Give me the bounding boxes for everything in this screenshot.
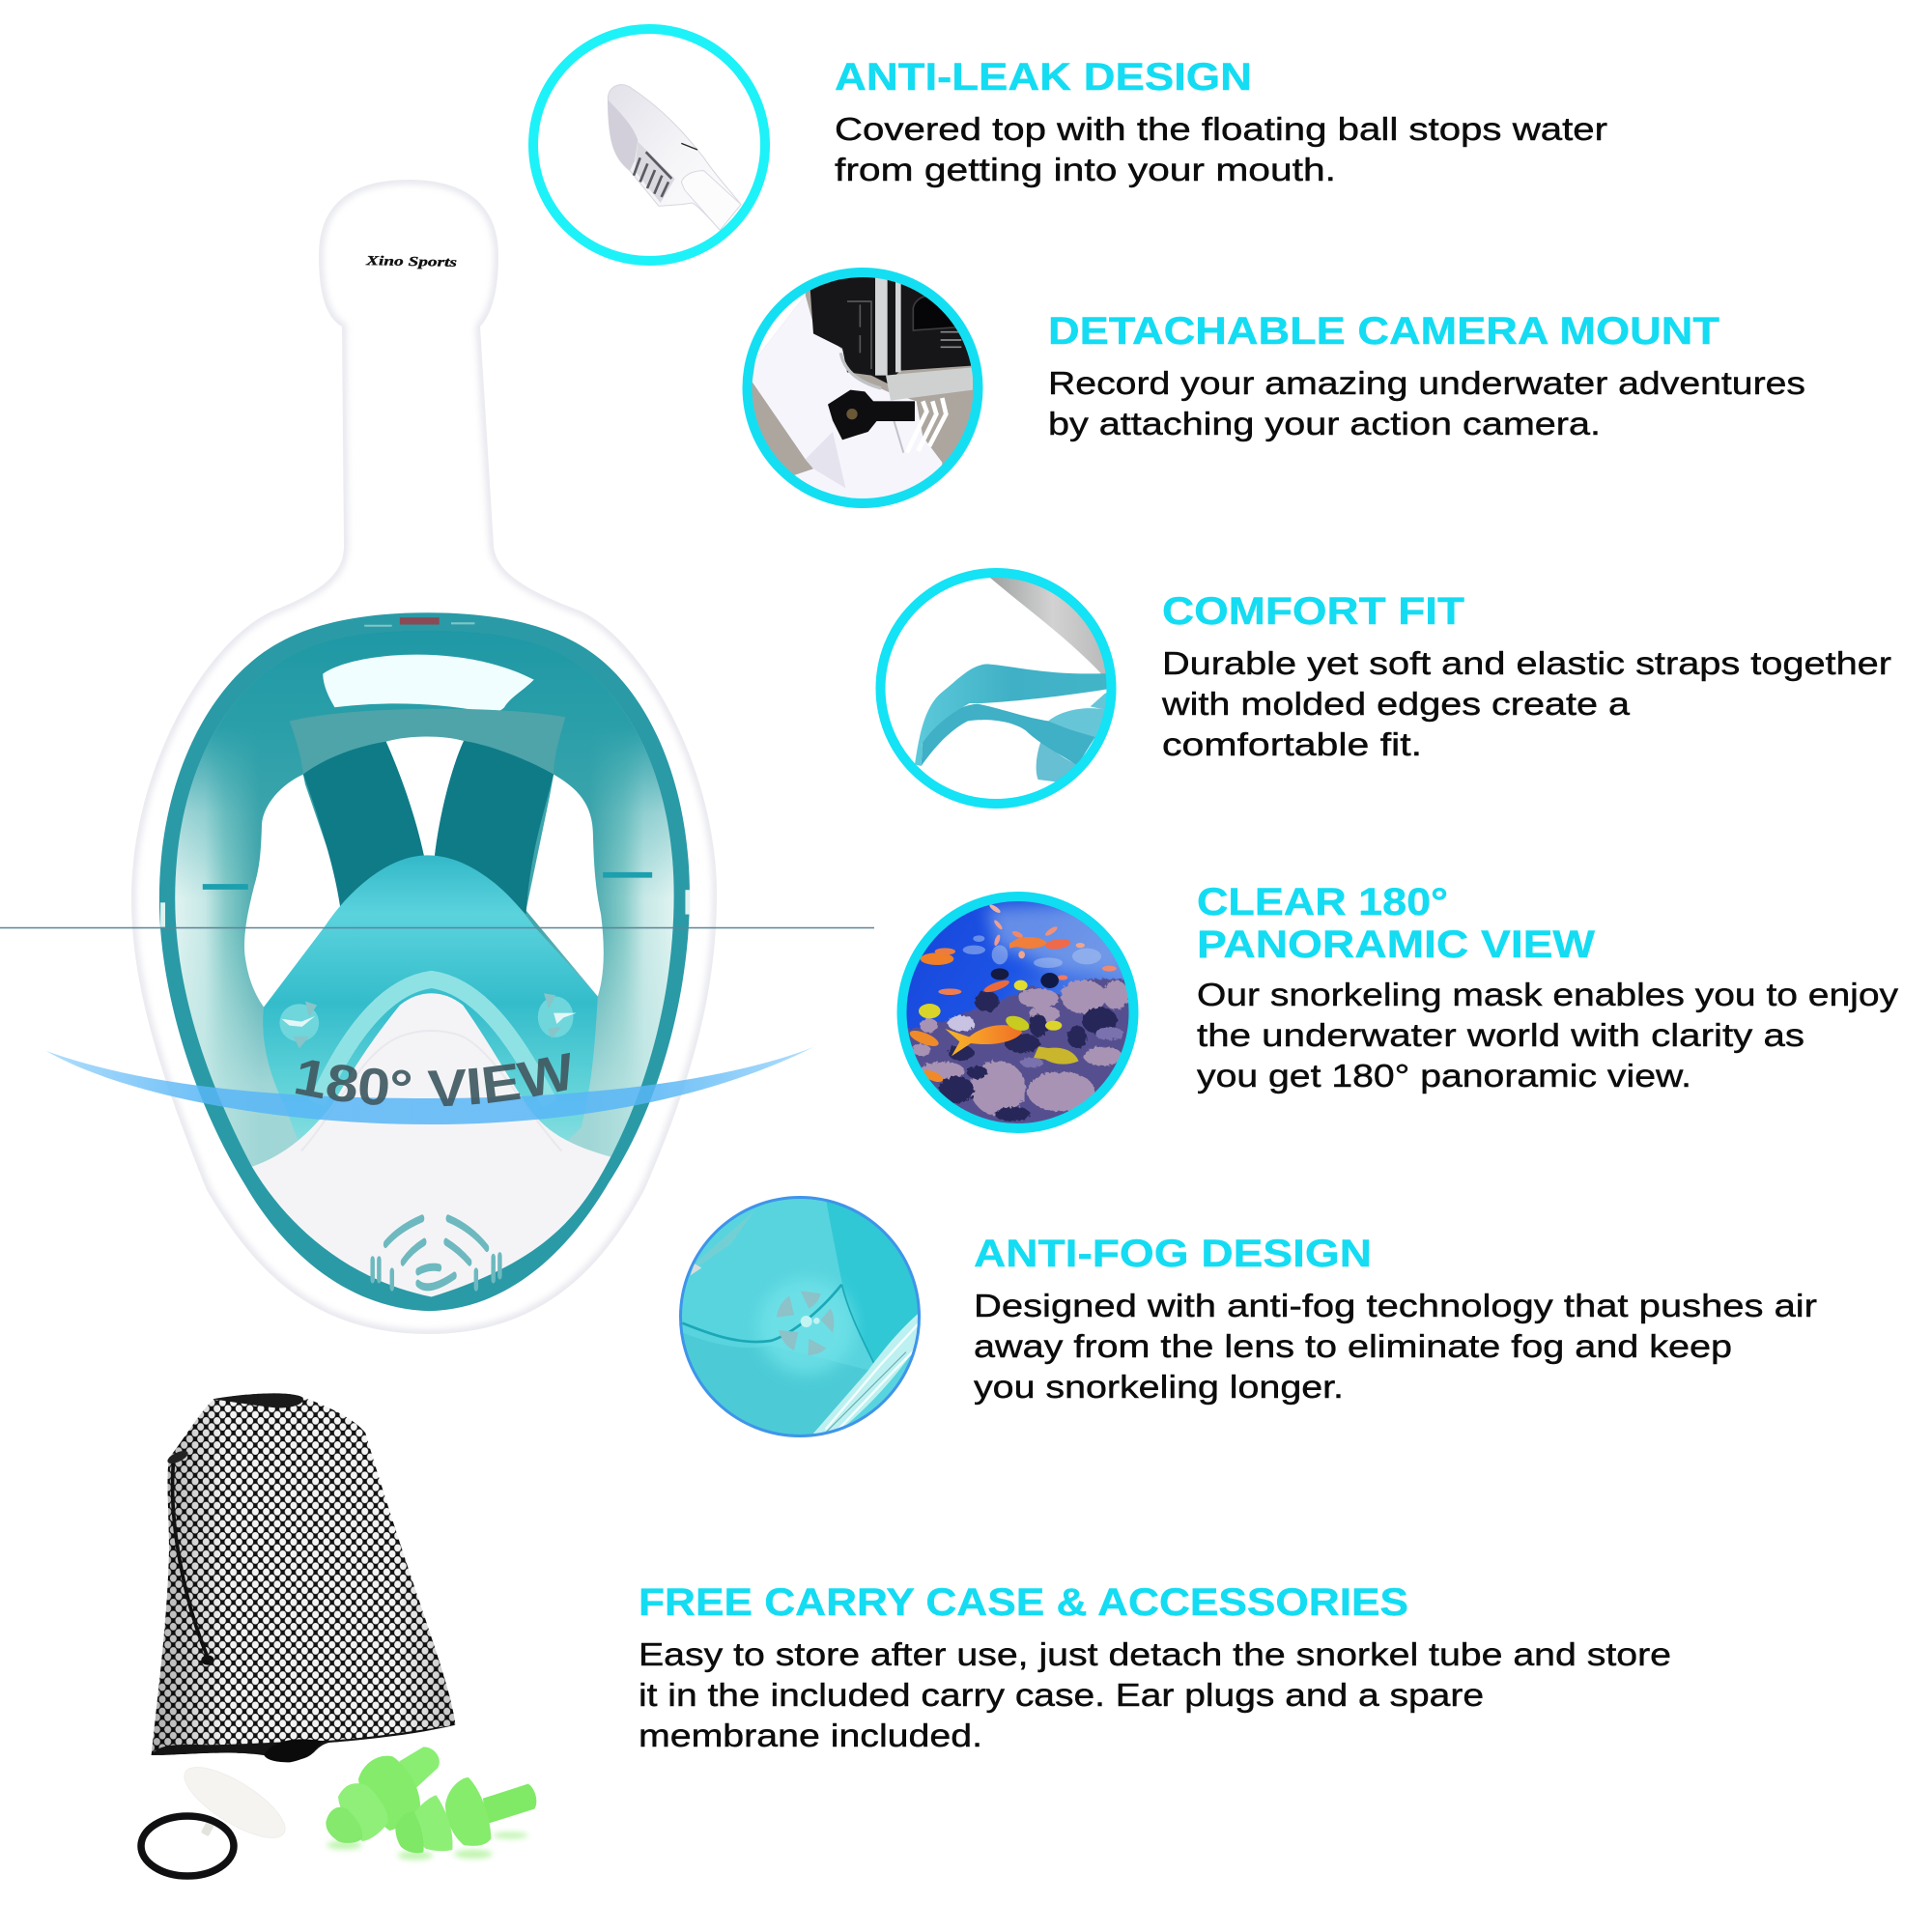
bag bottom hem <box>152 1725 456 1761</box>
text: anti-fog description: Designed with anti-fog technology that pushes air <box>974 1288 1817 1323</box>
blue edge ring <box>680 1198 920 1435</box>
text: camera description <box>1048 365 1805 441</box>
left strap <box>303 742 424 910</box>
cord toggle <box>166 1448 189 1466</box>
top label <box>364 617 474 626</box>
mesh body <box>152 1393 456 1761</box>
text: camera description: by attaching your action camera. <box>1048 406 1601 441</box>
heading: panoramic view: PANORAMIC VIEW <box>1197 923 1595 966</box>
exhaust vents <box>373 1218 499 1288</box>
white window left <box>244 775 349 1007</box>
bag tab <box>264 1739 322 1762</box>
circle: anti-fog <box>674 1191 925 1442</box>
brand logo: Xino Sports <box>365 254 458 270</box>
heading: comfort fit: COMFORT FIT <box>1162 590 1464 633</box>
nose pocket <box>263 855 598 1151</box>
text: comfort description: with molded edges create a <box>1161 686 1631 722</box>
spare membrane <box>175 1754 295 1851</box>
membrane disc <box>175 1754 295 1851</box>
side ticks <box>203 875 652 887</box>
left vent flower <box>279 1001 319 1048</box>
heading: camera mount: DETACHABLE CAMERA MOUNT <box>1048 310 1719 353</box>
cyan ring <box>902 896 1134 1128</box>
mesh shading <box>152 1393 456 1761</box>
lens top tint <box>175 631 674 1167</box>
snorkel mask product <box>131 180 717 1334</box>
heading: panoramic view: CLEAR 180° <box>1197 881 1448 923</box>
front plug <box>395 1777 536 1853</box>
snorkel top nozzle <box>608 85 741 230</box>
horizontal water line <box>0 927 874 929</box>
white chin piece <box>252 993 611 1297</box>
teal rim <box>159 612 690 1311</box>
membrane stem <box>201 1817 216 1836</box>
text: anti-leak description: from getting into your mouth. <box>835 152 1336 187</box>
text: carry case description: Easy to store after use, just detach the snorkel tube and store <box>639 1636 1671 1672</box>
white window right <box>526 775 604 996</box>
text: anti-fog description: you snorkeling longer. <box>974 1369 1344 1405</box>
heading: anti-fog design: ANTI-FOG DESIGN <box>974 1233 1372 1275</box>
circle: panoramic reef view <box>894 889 1145 1140</box>
cord knot <box>201 1655 214 1665</box>
circle: comfort fit <box>881 573 1116 804</box>
text: panoramic description: Our snorkeling mask enables you to enjoy <box>1197 977 1899 1012</box>
text: panoramic description <box>1197 977 1899 1094</box>
text: carry case description: it in the included carry case. Ear plugs and a spare <box>639 1677 1484 1713</box>
heading: panoramic view <box>1197 881 1595 966</box>
text: anti-fog description <box>974 1288 1817 1405</box>
text: panoramic description: you get 180° panoramic view. <box>1197 1058 1691 1094</box>
text: panoramic description: the underwater world with clarity as <box>1197 1017 1804 1053</box>
text: anti-fog description: away from the lens to eliminate fog and keep <box>974 1328 1732 1364</box>
cyan ring <box>748 272 978 503</box>
grey-teal brow band <box>290 709 565 775</box>
text: camera description: Record your amazing underwater adventures <box>1048 365 1805 401</box>
camera photo <box>752 277 974 498</box>
drawcord <box>173 1465 208 1658</box>
top lens highlight <box>323 655 534 713</box>
green ear plugs <box>326 1747 536 1860</box>
body edge shading <box>131 180 717 1334</box>
text: carry case description: membrane included. <box>639 1718 982 1753</box>
lens side tint <box>175 631 674 1167</box>
bag top gather <box>213 1393 303 1408</box>
text: comfort description: Durable yet soft and elastic straps together <box>1162 645 1891 681</box>
mask vent close-up <box>682 1199 918 1435</box>
black O-ring <box>141 1816 234 1876</box>
circle: camera mount <box>736 263 987 514</box>
heading: anti-leak design: ANTI-LEAK DESIGN <box>835 56 1252 99</box>
pocket pale edge <box>317 980 550 1103</box>
text: anti-leak description <box>835 111 1607 187</box>
plug shadows <box>327 1833 528 1860</box>
right vent flower <box>538 993 577 1038</box>
text: comfort description: comfortable fit. <box>1162 726 1422 762</box>
heading: carry case: FREE CARRY CASE & ACCESSORIES <box>639 1581 1408 1624</box>
text: comfort description <box>1161 645 1891 762</box>
lens assembly <box>159 612 690 1311</box>
cyan ring <box>881 573 1111 804</box>
mesh carry bag <box>152 1393 456 1762</box>
cyan ring <box>533 29 765 261</box>
white window centre <box>386 736 464 857</box>
reef photo <box>906 901 1128 1123</box>
right strap <box>435 741 554 915</box>
text: carry case description <box>639 1636 1671 1753</box>
180 view label: 180° VIEW <box>296 1053 570 1107</box>
rim clips <box>160 890 690 927</box>
back plug <box>326 1747 440 1843</box>
180 degree swoosh <box>46 1047 813 1124</box>
lens lower pale tint <box>175 631 674 1167</box>
chin moulding <box>301 1031 561 1151</box>
text: anti-leak description: Covered top with the floating ball stops water <box>835 111 1607 147</box>
strap photo <box>915 576 1116 782</box>
mask white body and snorkel <box>131 180 717 1334</box>
circle: anti-leak <box>533 29 765 261</box>
